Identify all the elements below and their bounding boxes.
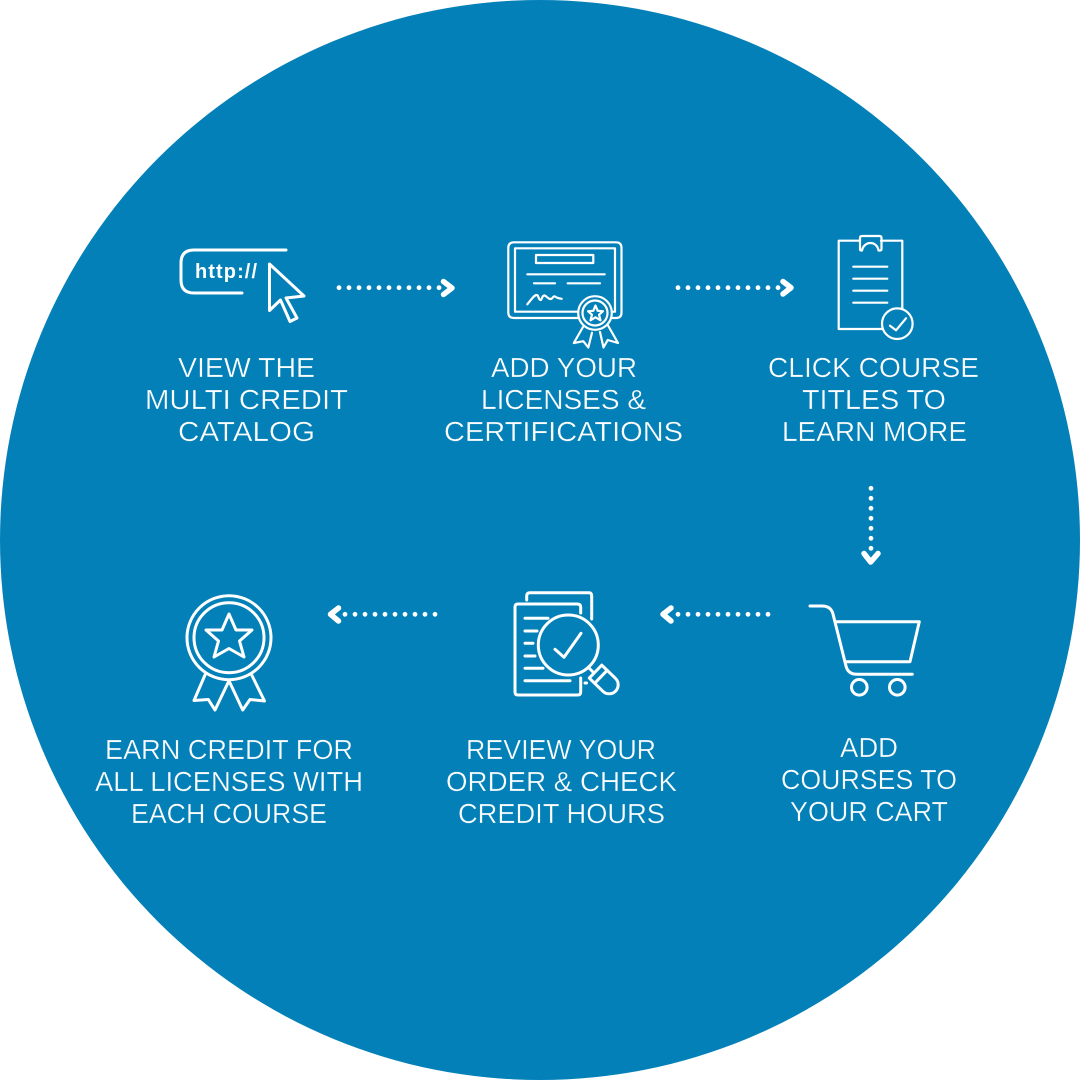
arrow: step 5 to step 6	[330, 608, 435, 621]
text: step 4: ADD	[840, 732, 898, 763]
text: step 2	[444, 352, 683, 447]
text: step 6: ALL LICENSES WITH	[95, 766, 363, 797]
text: step 2: CERTIFICATIONS	[444, 416, 683, 447]
text: step 1	[145, 352, 348, 447]
text: step 4: COURSES TO	[781, 764, 957, 795]
text: step 6: EACH COURSE	[131, 798, 327, 829]
icon: clipboard with check	[839, 236, 913, 339]
arrow: step 1 to step 2	[339, 282, 452, 294]
text: step 3: CLICK COURSE	[768, 352, 979, 383]
icon: certificate	[508, 242, 622, 348]
text: step 3	[768, 352, 979, 447]
text: step 1: MULTI CREDIT	[145, 384, 348, 415]
text: step 5: CREDIT HOURS	[458, 798, 665, 829]
icon: award medal	[187, 596, 271, 710]
icon: documents with magnifier	[515, 593, 622, 698]
text: step 2: LICENSES &	[481, 384, 646, 415]
text: step 5: REVIEW YOUR	[466, 734, 656, 765]
text: step 1: CATALOG	[178, 416, 315, 447]
text: step 6	[95, 734, 363, 829]
icon: http link and cursor: http://	[195, 261, 257, 283]
text: step 2: ADD YOUR	[491, 352, 637, 383]
text: step 1: VIEW THE	[178, 352, 315, 383]
arrow: step 4 to step 5	[663, 608, 768, 621]
text: step 6: EARN CREDIT FOR	[105, 734, 353, 765]
icon: http link and cursor	[181, 250, 304, 322]
text: step 5: ORDER & CHECK	[446, 766, 677, 797]
arrow: step 3 to step 4	[864, 488, 878, 562]
text: step 5	[446, 734, 677, 829]
text: step 4: YOUR CART	[790, 796, 948, 827]
text: step 3: TITLES TO	[802, 384, 946, 415]
text: step 3: LEARN MORE	[782, 416, 967, 447]
icon: shopping cart	[810, 606, 919, 695]
arrow: step 2 to step 3	[678, 282, 791, 294]
text: step 4	[781, 732, 957, 827]
